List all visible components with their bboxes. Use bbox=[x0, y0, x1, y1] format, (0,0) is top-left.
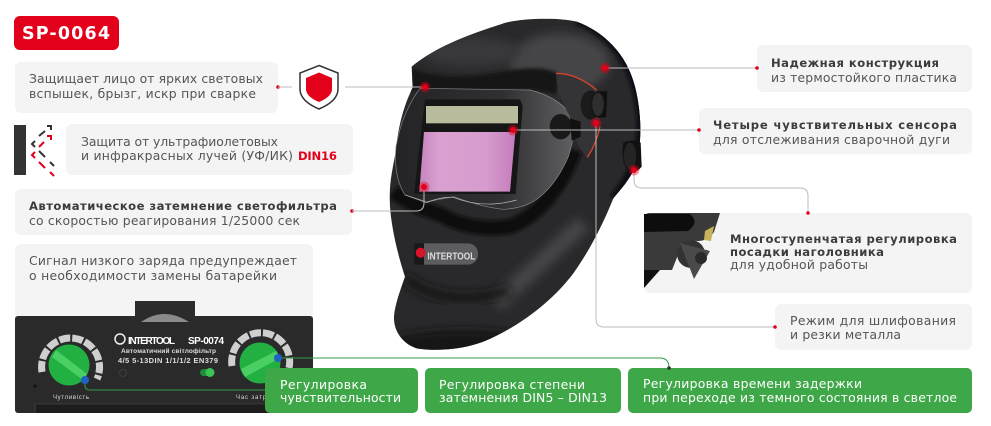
helmet bbox=[390, 18, 642, 350]
button: sensitivity: чувствительности bbox=[280, 390, 401, 405]
icon: UV rays bbox=[14, 125, 54, 176]
panel: face protection bbox=[15, 62, 280, 113]
visor window bbox=[396, 88, 573, 209]
right knob bbox=[240, 342, 280, 384]
shade under visor bbox=[393, 150, 575, 228]
button: sensitivity bbox=[265, 368, 418, 413]
panel: UV and IR protection: и инфракрасных лучей (УФ/ИК) bbox=[81, 148, 293, 163]
panel: low battery signal: Сигнал низкого заряда предупреждает bbox=[29, 253, 297, 268]
visor button bbox=[550, 114, 572, 139]
panel: headgear adjustment bbox=[644, 211, 972, 293]
top knob bbox=[581, 90, 607, 120]
panel brand text: INTERTOOL bbox=[128, 336, 175, 347]
panel: headgear adjustment: Многоступенчатая регулировка bbox=[730, 232, 957, 246]
panel: reliable construction bbox=[755, 45, 972, 92]
brow ridge bbox=[410, 68, 560, 95]
button: shade: Регулировка степени bbox=[439, 377, 585, 392]
button: sensitivity: Регулировка bbox=[280, 377, 367, 392]
panel brand text: Чутливість bbox=[53, 395, 89, 401]
panel: reliable construction: из термостойкого пластика bbox=[771, 70, 957, 85]
model badge bbox=[14, 16, 119, 50]
headgear photo bbox=[644, 213, 720, 288]
icon: shield bbox=[300, 66, 338, 109]
panel: UV and IR protection: Защита от ультрафиолетовых bbox=[81, 134, 278, 149]
panel: face protection: Защищает лицо от ярких световых bbox=[29, 71, 263, 86]
filter frame bbox=[414, 99, 523, 194]
panel: low battery signal bbox=[15, 244, 313, 334]
panel: reliable construction: Надежная конструкция bbox=[771, 56, 939, 70]
panel: grinding mode: Режим для шлифования bbox=[790, 313, 956, 328]
panel: auto darkening bbox=[15, 189, 354, 235]
panel: headgear adjustment: посадки наголовника bbox=[730, 245, 884, 259]
left dial scale bbox=[42, 338, 100, 379]
connector lines bbox=[278, 68, 808, 327]
panel brand text: Час затр bbox=[236, 395, 267, 401]
panel: four sensors: Четыре чувствительных сенсора bbox=[713, 118, 957, 132]
helmet callout points bbox=[418, 62, 640, 192]
panel brand text: Автоматичний світлофільтр bbox=[121, 347, 216, 355]
panel brand text bbox=[53, 334, 267, 401]
control panel photo bbox=[15, 301, 313, 413]
blue sensor dots bbox=[81, 354, 282, 384]
button: delay time: Регулировка времени задержки bbox=[643, 376, 862, 391]
red side label bbox=[556, 73, 600, 157]
panel: four sensors: для отслеживания сварочной дуги bbox=[713, 132, 950, 147]
button: shade: затемнения DIN5 – DIN13 bbox=[439, 390, 607, 405]
helmet shell bbox=[390, 18, 640, 350]
logo bbox=[414, 243, 478, 265]
green leader lines bbox=[85, 358, 669, 390]
panel: four sensors bbox=[697, 108, 972, 154]
model badge: SP-0064 bbox=[22, 24, 110, 44]
vent mesh bbox=[570, 118, 581, 141]
left knob bbox=[48, 344, 90, 386]
panel: UV and IR protection bbox=[66, 124, 353, 175]
panel: grinding mode: и резки металла bbox=[790, 327, 901, 342]
panel: UV and IR protection: DIN16 bbox=[298, 149, 337, 163]
right dial scale bbox=[232, 333, 290, 368]
panel: auto darkening: со скоростью реагирования 1/25000 сек bbox=[29, 213, 301, 228]
panel brand text: 4/5 5-13DIN 1/1/1/2 EN379 bbox=[118, 356, 218, 365]
panel: low battery signal: о необходимости замены батарейки bbox=[29, 268, 277, 283]
logo: INTERTOOL bbox=[427, 251, 475, 262]
panel: grinding mode bbox=[773, 304, 972, 350]
button: delay time bbox=[628, 366, 972, 413]
panel: headgear adjustment: для удобной работы bbox=[730, 257, 868, 272]
panel: face protection: вспышек, брызг, искр при сварке bbox=[29, 86, 256, 101]
side knob bbox=[623, 140, 642, 172]
panel: auto darkening: Автоматическое затемнение светофильтра bbox=[29, 199, 337, 213]
solar panel bbox=[426, 106, 518, 123]
shell shading bbox=[510, 33, 610, 93]
panel brand text: SP-0074 bbox=[188, 336, 224, 347]
button: shade bbox=[425, 368, 621, 413]
visor lower seal bbox=[405, 195, 517, 204]
dark lens bbox=[419, 132, 515, 192]
button: delay time: при переходе из темного состояния в светлое bbox=[643, 390, 957, 405]
